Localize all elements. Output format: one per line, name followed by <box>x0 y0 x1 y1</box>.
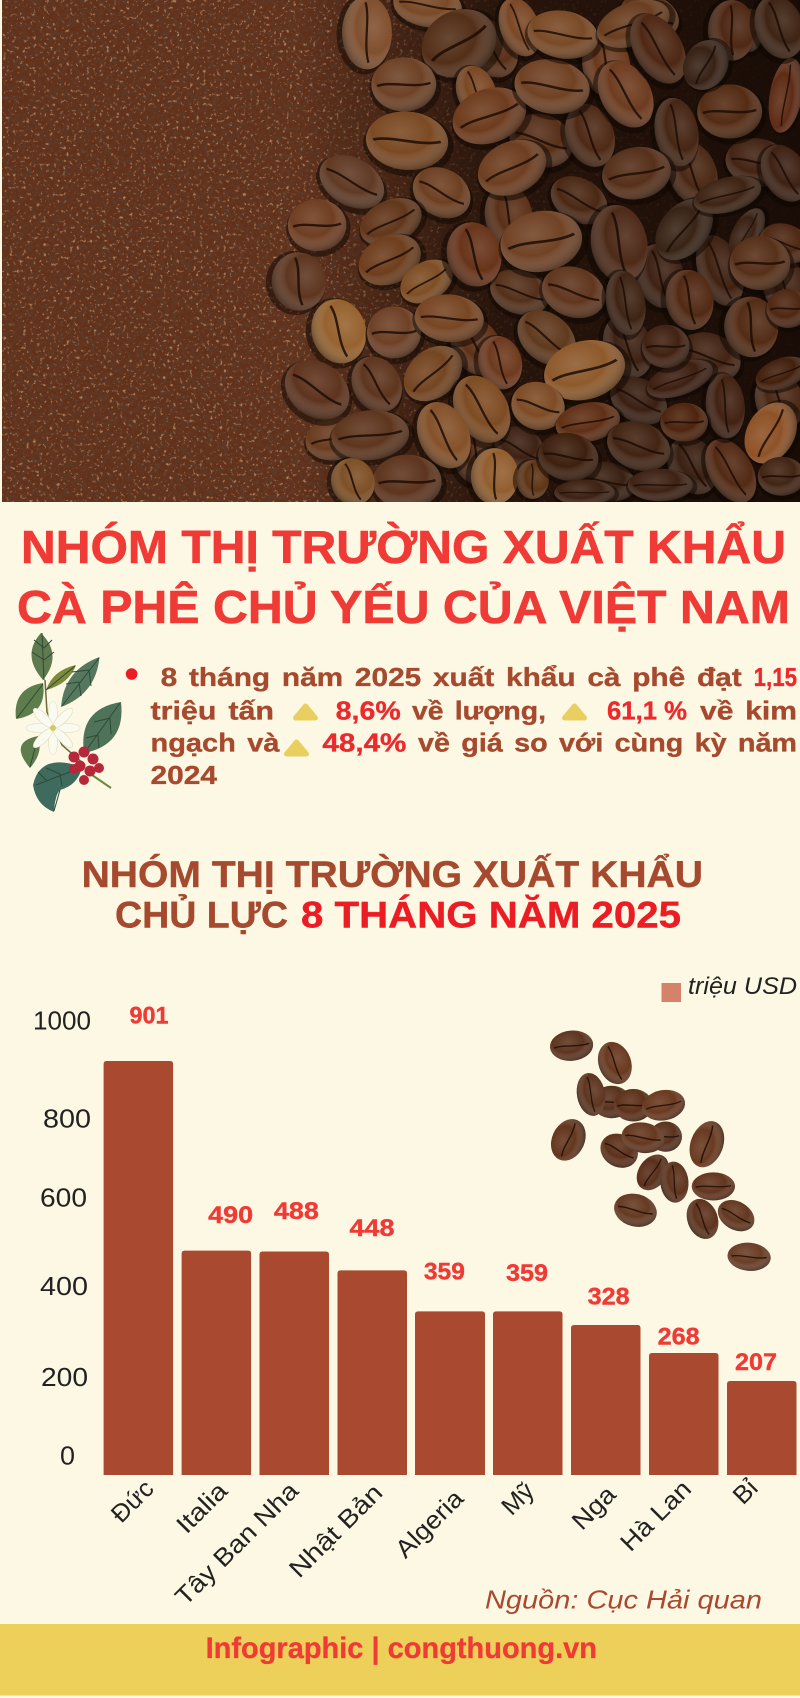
summary text with bullet and up-arrows: 8,6% <box>336 695 401 725</box>
x axis market labels: Bỉ <box>727 1474 764 1510</box>
y axis labels: 800 <box>43 1104 91 1134</box>
summary text with bullet and up-arrows: triệu tấn <box>150 695 274 725</box>
summary text with bullet and up-arrows: ngạch và <box>150 728 280 758</box>
y axis labels: 200 <box>41 1362 88 1392</box>
y axis labels: 0 <box>60 1440 75 1470</box>
footer band <box>0 1624 800 1696</box>
summary text with bullet and up-arrows: về giá so với cùng kỳ năm <box>418 728 797 758</box>
summary text with bullet and up-arrows: về kim <box>700 695 797 725</box>
chart heading: NHÓM THỊ TRƯỜNG XUẤT KHẨU <box>82 853 703 895</box>
legend: triệu USD <box>688 973 797 1000</box>
summary text with bullet and up-arrows: 8 tháng năm 2025 xuất khẩu cà phê đạt <box>161 662 742 692</box>
bullet <box>126 668 137 680</box>
source note: Nguồn: Cục Hải quan <box>485 1584 762 1614</box>
icon: scattered coffee beans <box>544 1029 772 1273</box>
icon: coffee branch with flowers and berries <box>16 633 122 812</box>
summary text with bullet and up-arrows: 61,1 % <box>607 695 687 725</box>
value labels <box>130 1002 777 1376</box>
x axis market labels: Nhật Bản <box>284 1479 388 1583</box>
chart heading: CHỦ LỰC <box>115 894 288 936</box>
summary text with bullet and up-arrows <box>126 662 797 790</box>
title: CÀ PHÊ CHỦ YẾU CỦA VIỆT NAM <box>17 581 790 633</box>
x axis market labels: Mỹ <box>496 1477 540 1521</box>
title: NHÓM THỊ TRƯỜNG XUẤT KHẨU <box>21 521 786 573</box>
x axis market labels: Tây Ban Nha <box>170 1477 304 1611</box>
summary text with bullet and up-arrows: 48,4% <box>322 728 406 758</box>
value labels: 901 <box>130 1002 168 1030</box>
value labels: 490 <box>208 1202 253 1229</box>
icon: up triangle <box>296 706 316 718</box>
x axis market labels: Nga <box>566 1480 622 1536</box>
icon: up triangle <box>286 742 306 754</box>
x axis market labels: Algeria <box>390 1484 469 1564</box>
summary text with bullet and up-arrows: 2024 <box>150 760 218 790</box>
bar chart: export value by market <box>33 1002 796 1611</box>
bars <box>104 1061 797 1475</box>
chart heading: 8 THÁNG NĂM 2025 <box>301 895 681 936</box>
y axis labels: 400 <box>40 1271 88 1301</box>
icon: up triangle <box>564 706 584 718</box>
x axis market labels: Italia <box>171 1477 233 1539</box>
hero photo: coffee grounds and roasted beans <box>2 0 800 518</box>
x axis market labels <box>106 1474 764 1611</box>
y axis labels: 1000 <box>33 1006 91 1036</box>
footer band: Infographic | congthuong.vn <box>206 1632 597 1665</box>
value labels: 207 <box>735 1349 777 1376</box>
value labels: 359 <box>506 1260 548 1287</box>
value labels: 448 <box>350 1215 394 1242</box>
y axis labels <box>33 1006 91 1470</box>
y axis labels: 600 <box>40 1182 87 1212</box>
value labels: 359 <box>424 1258 465 1286</box>
title <box>17 521 790 633</box>
value labels: 328 <box>588 1284 630 1310</box>
summary text with bullet and up-arrows: về lượng, <box>412 695 546 725</box>
chart heading <box>82 853 703 936</box>
value labels: 488 <box>274 1198 319 1225</box>
x axis market labels: Hà Lan <box>615 1475 697 1557</box>
x axis market labels: Đức <box>106 1475 159 1528</box>
value labels: 268 <box>658 1324 700 1350</box>
